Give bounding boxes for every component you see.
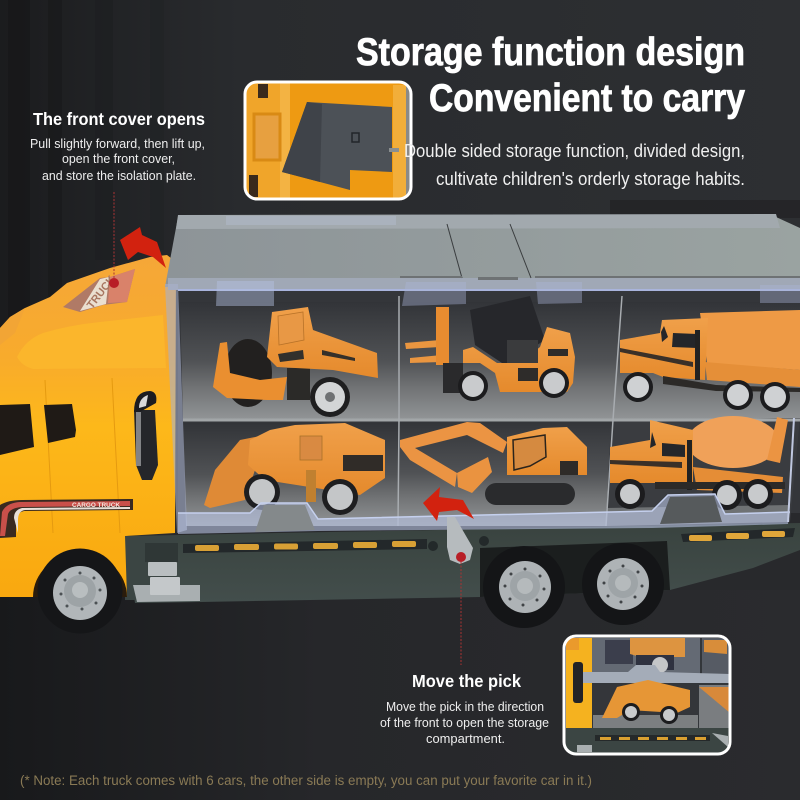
callout: the front cover opens: The front cover opens	[33, 109, 205, 129]
clear front cover	[165, 281, 800, 534]
subtitle text: Double sided storage function, divided design,	[404, 141, 745, 161]
subtitle text	[404, 141, 745, 189]
cargo container	[165, 214, 800, 534]
container lid	[165, 214, 800, 290]
cab logo decal	[63, 269, 135, 312]
vehicle: excavator	[400, 422, 587, 505]
exhaust pipe	[134, 391, 158, 480]
title	[356, 31, 745, 120]
vehicle: forklift	[405, 296, 575, 401]
cab windows	[0, 404, 76, 455]
marker lights	[183, 528, 795, 553]
cab	[0, 255, 176, 597]
compartment arrow	[423, 487, 474, 521]
front wheel	[38, 548, 122, 634]
chassis	[125, 523, 800, 603]
callout: the front cover opens: open the front cover,	[62, 152, 175, 166]
callout: the front cover opens	[30, 109, 205, 183]
callout: the front cover opens: and store the isolation plate.	[42, 169, 196, 183]
callout: move the pick: compartment.	[426, 732, 505, 746]
cab logo decal: TRUCK	[85, 273, 118, 311]
callout: move the pick: Move the pick in the direction	[386, 700, 544, 714]
vehicle: cement mixer	[610, 416, 788, 510]
cargo truck stripe: CARGO TRUCK	[72, 502, 120, 509]
inset photo: open compartment	[564, 636, 730, 754]
callout: the front cover opens: Pull slightly forward, then lift up,	[30, 137, 205, 151]
inset photo: isolation plate in cab	[245, 82, 411, 199]
vehicle: dump truck	[620, 310, 800, 412]
truck	[0, 192, 800, 665]
cargo truck stripe	[0, 499, 133, 538]
footnote: (* Note: Each truck comes with 6 cars, the other side is empty, you can put your favorite car in it.)	[20, 773, 592, 788]
leader line: move the pick	[456, 552, 466, 665]
title: Storage function design	[356, 31, 745, 74]
front cover arrow	[120, 227, 166, 268]
leader line: front cover	[109, 192, 119, 288]
vehicle: wheel loader	[204, 423, 385, 515]
storage cells	[178, 291, 800, 526]
callout: move the pick: of the front to open the storage	[380, 716, 549, 730]
vehicle: road roller	[213, 307, 378, 417]
subtitle text: cultivate children's orderly storage habits.	[436, 169, 745, 189]
callout: move the pick: Move the pick	[412, 671, 521, 691]
pick lever	[428, 517, 489, 564]
title: Convenient to carry	[429, 77, 745, 120]
callout: move the pick	[380, 671, 549, 746]
rear wheels	[483, 543, 664, 628]
